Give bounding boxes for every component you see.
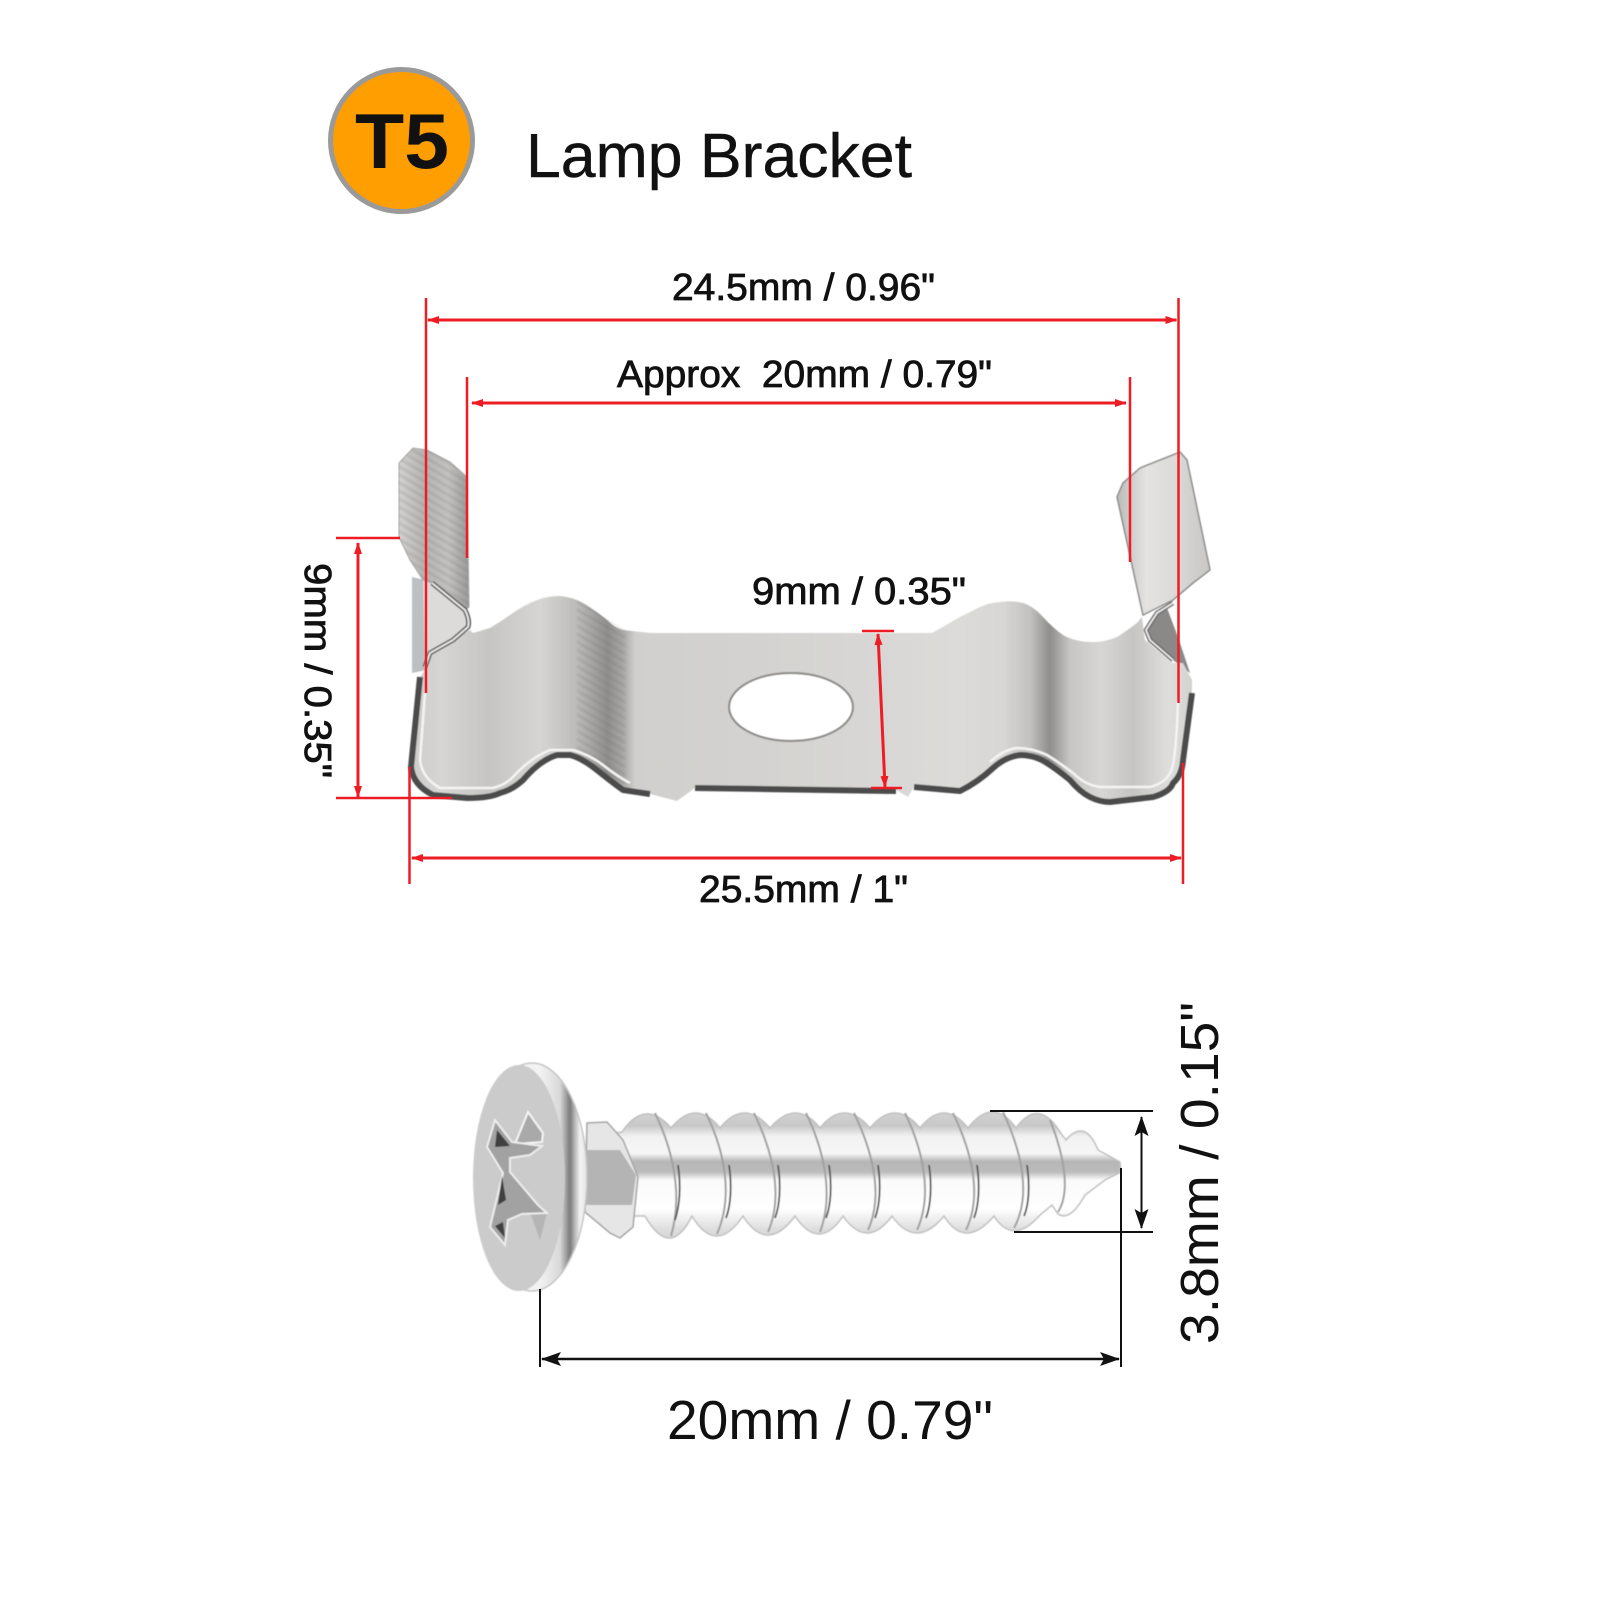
- cap: centre bottom: [871, 787, 902, 789]
- body left streaks: [577, 600, 625, 788]
- mounting hole rim: [729, 673, 853, 741]
- extension: bottom right: [1182, 763, 1184, 884]
- label: 9mm / 0.35" left rotated: 9mm / 0.35": [296, 563, 338, 778]
- cross recess shadow: [495, 1130, 510, 1238]
- screw head rim: [477, 1063, 587, 1291]
- arrow: 9mm centre: [878, 634, 885, 787]
- extension: thread bottom: [1014, 1231, 1153, 1233]
- title: Lamp Bracket: Lamp Bracket: [526, 122, 912, 191]
- arrow: 25.5mm width: [412, 856, 1181, 860]
- cross recess upper right: [515, 1112, 543, 1144]
- extension: inner left: [466, 377, 468, 558]
- right fold: [1146, 603, 1173, 660]
- left fold: [425, 583, 469, 667]
- label: 25.5mm / 1": 25.5mm / 1": [699, 869, 908, 911]
- bottom dark edge: [411, 677, 1192, 802]
- thread edges light: [655, 1112, 1065, 1236]
- bracket photo: [399, 448, 1210, 802]
- right tab: [1117, 452, 1210, 615]
- screw head face: [473, 1065, 565, 1291]
- left back strip: [412, 577, 427, 673]
- left fold fill: [423, 580, 468, 667]
- extension: height bottom: [336, 797, 452, 799]
- extension: tip: [1120, 1168, 1122, 1367]
- extension: bottom left: [408, 767, 411, 884]
- badge: T5: T5: [355, 97, 449, 185]
- black dimension lines: screw: [540, 1111, 1153, 1367]
- thread edges dark: [675, 1165, 1029, 1220]
- label: 20mm / 0.79": 20mm / 0.79": [667, 1389, 993, 1451]
- extension: outer left: [425, 298, 427, 693]
- right back fold: [1146, 608, 1190, 673]
- extension: thread top: [990, 1110, 1153, 1112]
- arrow: 9mm height left: [356, 543, 360, 797]
- cross recess main: [487, 1120, 547, 1245]
- extension: head: [539, 1289, 541, 1367]
- label: Approx 20mm / 0.79": Approx 20mm / 0.79": [617, 354, 992, 396]
- extension: outer right: [1177, 298, 1180, 703]
- label: 9mm / 0.35" centre: 9mm / 0.35": [752, 571, 966, 613]
- extension: inner right: [1129, 377, 1131, 562]
- bracket body: [410, 596, 1192, 802]
- bottom highlight: [420, 693, 1178, 788]
- screw threaded silhouette: [600, 1112, 1121, 1238]
- arrow: 3.8mm: [1140, 1117, 1142, 1228]
- red extension lines: [336, 298, 1183, 884]
- screw photo: [473, 1063, 1121, 1291]
- cross recess lower arm: [530, 1212, 547, 1240]
- left tab: [399, 448, 469, 610]
- label: 24.5mm / 0.96": 24.5mm / 0.96": [672, 267, 935, 309]
- cap: centre top: [862, 630, 894, 632]
- collar shadow: [585, 1150, 636, 1205]
- screw collar: [585, 1122, 638, 1238]
- label: 3.8mm / 0.15" rotated: 3.8mm / 0.15": [1170, 1002, 1230, 1344]
- extension: height top: [336, 537, 400, 539]
- arrow: 20mm length: [542, 1358, 1119, 1360]
- arrow: 24.5mm width: [428, 318, 1176, 322]
- badge: T5: [330, 70, 472, 212]
- arrow: 20mm inner width: [472, 402, 1126, 404]
